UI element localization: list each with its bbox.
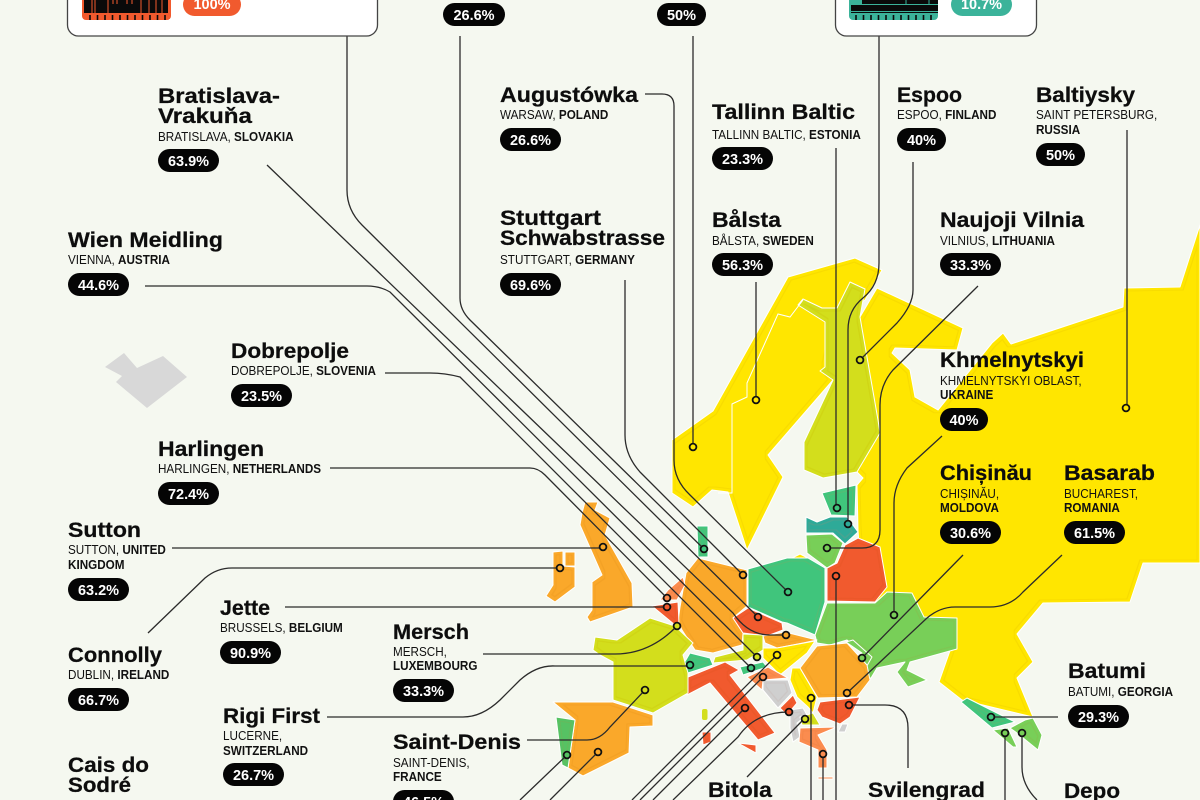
label: Naujoji Vilnia <box>940 208 1085 276</box>
region: Germany <box>678 558 747 653</box>
label: Bratislava-Vrakuňa <box>158 84 294 172</box>
region: Kaliningrad <box>792 554 808 558</box>
region: Belgium <box>652 602 679 625</box>
label: Wien Meidling <box>68 228 223 296</box>
label: Saint-Denis: FRANCE <box>393 769 442 784</box>
region: Thrace <box>838 724 848 732</box>
label: Dobrepolje <box>231 339 376 407</box>
pill: 100% <box>183 0 241 16</box>
label: Bratislava-Vrakuňa: Bratislava- <box>158 84 280 108</box>
label: Khmelnytskyi <box>940 348 1084 431</box>
label: Espoo: Espoo <box>897 83 962 107</box>
label: Naujoji Vilnia: VILNIUS, LITHUANIA <box>940 233 1055 248</box>
label: Bålsta: Bålsta <box>712 208 782 232</box>
label: Augustówka <box>500 83 639 151</box>
label: Stuttgart Schwabstrasse: Stuttgart <box>500 206 601 230</box>
region: Slovakia <box>763 632 817 648</box>
pill: 10.7% <box>951 0 1012 16</box>
label: Harlingen: 72.4% <box>168 487 209 503</box>
label: Stuttgart Schwabstrasse: Schwabstrasse <box>500 226 665 250</box>
label: Espoo <box>897 83 996 151</box>
label: Connolly: Connolly <box>68 643 162 667</box>
label: Harlingen <box>158 437 321 505</box>
region: Ukraine <box>815 592 957 687</box>
region: Portugal <box>556 717 575 768</box>
label: Baltiysky: SAINT PETERSBURG, <box>1036 107 1157 122</box>
region: Italy <box>687 662 775 740</box>
region: Montenegro <box>780 695 797 715</box>
label: Baltiysky: 50% <box>1046 148 1075 164</box>
label: Bålsta: 56.3% <box>722 258 763 274</box>
region: Albania <box>790 708 807 742</box>
label: Saint-Denis: SAINT-DENIS, <box>393 755 470 770</box>
label: Mersch <box>393 620 477 702</box>
region: Czechia <box>733 608 783 636</box>
region: Azerbaijan <box>1010 718 1042 750</box>
icon: train teal <box>849 0 938 20</box>
region: Spain <box>553 702 653 776</box>
region: Croatia <box>747 667 788 690</box>
region: Sardinia <box>702 709 708 720</box>
label: Bratislava-Vrakuňa: BRATISLAVA, SLOVAKIA <box>158 129 294 144</box>
label: Espoo: 40% <box>907 133 936 149</box>
label: Stuttgart Schwabstrasse: 69.6% <box>510 278 551 294</box>
label: Wien Meidling: 44.6% <box>78 278 119 294</box>
label: Stuttgart Schwabstrasse <box>500 206 665 296</box>
region: Serbia <box>790 668 817 713</box>
region: Netherlands <box>660 577 685 600</box>
region: Finland <box>798 282 880 478</box>
region: Switzerland <box>683 653 713 673</box>
panel: highest share card <box>68 0 378 36</box>
label: Baltiysky: Baltiysky <box>1036 83 1135 107</box>
region: Hungary <box>763 641 815 675</box>
label: Bratislava-Vrakuňa: Vrakuňa <box>158 104 253 128</box>
label: Mersch: LUXEMBOURG <box>393 658 477 673</box>
region: Bulgaria <box>817 697 860 724</box>
region: Lithuania <box>806 534 843 568</box>
label: Bålsta: BÅLSTA, SWEDEN <box>712 232 814 248</box>
label: Bratislava-Vrakuňa: 63.9% <box>168 154 209 170</box>
label: Augustówka: 26.6% <box>510 133 551 149</box>
label: Dobrepolje: Dobrepolje <box>231 339 349 363</box>
region: Slovenia <box>740 662 767 675</box>
label: Khmelnytskyi: Khmelnytskyi <box>940 348 1084 372</box>
label: Chișinău: 30.6% <box>950 526 991 542</box>
label: Mersch: 33.3% <box>403 684 444 700</box>
region: Poland <box>748 558 825 635</box>
region: Bosnia <box>763 680 792 708</box>
region: United Kingdom <box>580 502 633 622</box>
label: Harlingen: Harlingen <box>158 437 264 461</box>
label: Batumi: BATUMI, GEORGIA <box>1068 684 1173 699</box>
panel: lowest share card <box>836 0 1036 36</box>
region: Northern Ireland <box>565 552 575 566</box>
label: Dobrepolje: 23.5% <box>241 389 282 405</box>
label: Batumi: 29.3% <box>1078 710 1119 726</box>
label: Augustówka: WARSAW, POLAND <box>500 107 608 122</box>
label: Mersch: Mersch <box>393 620 469 644</box>
label: Augustówka: Augustówka <box>500 83 639 107</box>
pill: top 50%: 50% <box>667 8 696 24</box>
label: Wien Meidling: VIENNA, AUSTRIA <box>68 252 170 267</box>
label: Wien Meidling: Wien Meidling <box>68 228 223 252</box>
label: Jette <box>220 596 343 664</box>
region: France <box>593 618 693 713</box>
label: Espoo: ESPOO, FINLAND <box>897 107 996 122</box>
label: Sutton: KINGDOM <box>68 557 125 572</box>
region: Georgia <box>961 698 1015 728</box>
label: Rigi First: Rigi First <box>223 704 320 728</box>
region: Sicily <box>738 743 756 753</box>
label: Sutton: Sutton <box>68 518 141 542</box>
region: Moldova <box>846 640 872 678</box>
label: Sutton: SUTTON, UNITED <box>68 542 166 557</box>
label: Bålsta <box>712 208 814 276</box>
label: Cais do Sodré: Sodré <box>68 773 131 797</box>
label: Cais do Sodré: Cais do <box>68 753 149 777</box>
label: Baltiysky: RUSSIA <box>1036 122 1080 137</box>
label: Saint-Denis <box>393 730 521 800</box>
label: Chișinău: Chișinău <box>940 461 1032 485</box>
label: Chișinău: CHIȘINĂU, <box>940 485 999 501</box>
region: North Macedonia <box>800 713 820 725</box>
label: Cais do Sodré <box>68 753 183 800</box>
region: Crete <box>818 777 833 779</box>
label: Connolly: DUBLIN, IRELAND <box>68 667 169 682</box>
connector lines <box>145 36 1127 800</box>
label: Batumi <box>1068 659 1173 728</box>
region: Norway and Sweden <box>672 258 882 550</box>
pill: top 26.6% <box>443 3 505 26</box>
label: Basarab <box>1064 461 1155 544</box>
label: Connolly: 66.7% <box>78 693 119 709</box>
station markers <box>557 357 1129 758</box>
label: Naujoji Vilnia: 33.3% <box>950 258 991 274</box>
region: Latvia <box>806 517 858 544</box>
label: Rigi First: SWITZERLAND <box>223 743 308 758</box>
label: Baltiysky <box>1036 83 1157 166</box>
label: Khmelnytskyi: KHMELNYTSKYI OBLAST, <box>940 373 1082 388</box>
label: Jette: BRUSSELS, BELGIUM <box>220 620 343 635</box>
region: Romania <box>800 643 870 698</box>
label: Stuttgart Schwabstrasse: STUTTGART, GERMANY <box>500 252 636 267</box>
label: Harlingen: HARLINGEN, NETHERLANDS <box>158 461 321 476</box>
label: Batumi: Batumi <box>1068 659 1146 683</box>
label: Jette: Jette <box>220 596 270 620</box>
label: Chișinău: MOLDOVA <box>940 500 999 515</box>
label: Tallinn Baltic: TALLINN BALTIC, ESTONIA <box>712 127 861 142</box>
region: Corsica <box>702 732 711 745</box>
label: Basarab: BUCHAREST, <box>1064 486 1138 501</box>
label: Tallinn Baltic <box>712 100 861 170</box>
label: Naujoji Vilnia: Naujoji Vilnia <box>940 208 1085 232</box>
region: Estonia <box>822 485 856 516</box>
label: Basarab: ROMANIA <box>1064 500 1120 515</box>
region: Ireland <box>546 551 575 602</box>
label: Chișinău <box>940 461 1032 544</box>
map of Europe <box>546 225 1200 779</box>
label: Basarab: 61.5% <box>1074 526 1115 542</box>
label: Saint-Denis: Saint-Denis <box>393 730 521 754</box>
region: Armenia <box>993 728 1017 747</box>
label: Khmelnytskyi: UKRAINE <box>940 387 993 402</box>
label: Basarab: Basarab <box>1064 461 1155 485</box>
region: Austria <box>713 634 763 663</box>
label: Jette: 90.9% <box>230 646 271 662</box>
label: Rigi First: LUCERNE, <box>223 728 282 743</box>
pill: top 50% <box>657 3 706 26</box>
label: Tallinn Baltic: 23.3% <box>722 152 763 168</box>
label: Connolly <box>68 643 169 711</box>
icon: grey inset shape <box>105 353 187 408</box>
label: Sutton <box>68 518 166 601</box>
region: Greece <box>799 727 837 768</box>
label: Rigi First <box>223 704 320 786</box>
label: Tallinn Baltic: Tallinn Baltic <box>712 100 855 124</box>
label: Khmelnytskyi: 40% <box>949 413 979 429</box>
region: Russia <box>857 225 1200 717</box>
label: Rigi First: 26.7% <box>233 768 274 784</box>
region: Denmark <box>697 526 708 557</box>
label: Mersch: MERSCH, <box>393 644 447 659</box>
icon: train red <box>82 0 171 20</box>
label: Sutton: 63.2% <box>78 583 119 599</box>
region: Belarus <box>827 538 887 602</box>
pill: top 26.6%: 26.6% <box>453 8 495 24</box>
label: Dobrepolje: DOBREPOLJE, SLOVENIA <box>231 363 376 378</box>
